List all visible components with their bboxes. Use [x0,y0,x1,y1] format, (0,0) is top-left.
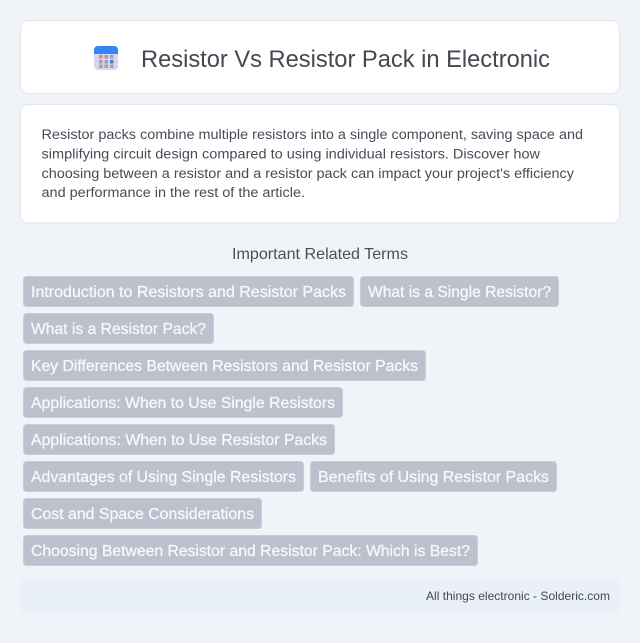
chip: introduction: Introduction to Resistors and Resistor Packs [31,284,346,301]
footer [20,579,620,613]
chip: key differences: Key Differences Between Resistors and Resistor Packs [31,358,418,375]
panel: header card [20,20,620,94]
text block: intro paragraph: choosing between a resistor and a resistor pack can impact your project's efficiency [42,166,575,182]
heading: important related terms: Important Related Terms [232,246,408,263]
chip: advantages: Advantages of Using Single Resistors [31,469,296,486]
chip: applications single: Applications: When to Use Single Resistors [31,395,335,412]
chip: cost and space: Cost and Space Considerations [31,506,254,523]
chip: cost and space [24,498,262,528]
chip: introduction [24,276,354,306]
chip: applications single [24,388,342,418]
title: Resistor Vs Resistor Pack in Electronic [141,46,550,73]
chip: benefits [310,462,556,492]
text block: intro paragraph: simplifying circuit design compared to using individual resistors. Discover how [42,146,541,162]
chip: choosing [24,536,478,566]
text block: intro paragraph [42,127,583,201]
footer text: All things electronic - Solderic.com [426,589,610,603]
chip: single resistor [360,276,558,306]
chip: benefits: Benefits of Using Resistor Packs [318,469,549,486]
chip: resistor pack: What is a Resistor Pack? [31,321,206,338]
chip: advantages [24,462,304,492]
panel: term chips [24,276,558,566]
panel: intro card [20,104,620,223]
chip: single resistor: What is a Single Resistor? [368,284,551,301]
chip: key differences [24,350,426,380]
chip: choosing: Choosing Between Resistor and Resistor Pack: Which is Best? [31,543,470,560]
icon: calendar [94,46,118,70]
chip: applications packs [24,424,334,454]
text block: intro paragraph: Resistor packs combine multiple resistors into a single component, saving space and [42,127,583,143]
chip: resistor pack [24,314,214,344]
chip: applications packs: Applications: When to Use Resistor Packs [31,432,327,449]
text block: intro paragraph: and performance in the rest of the article. [42,185,305,201]
